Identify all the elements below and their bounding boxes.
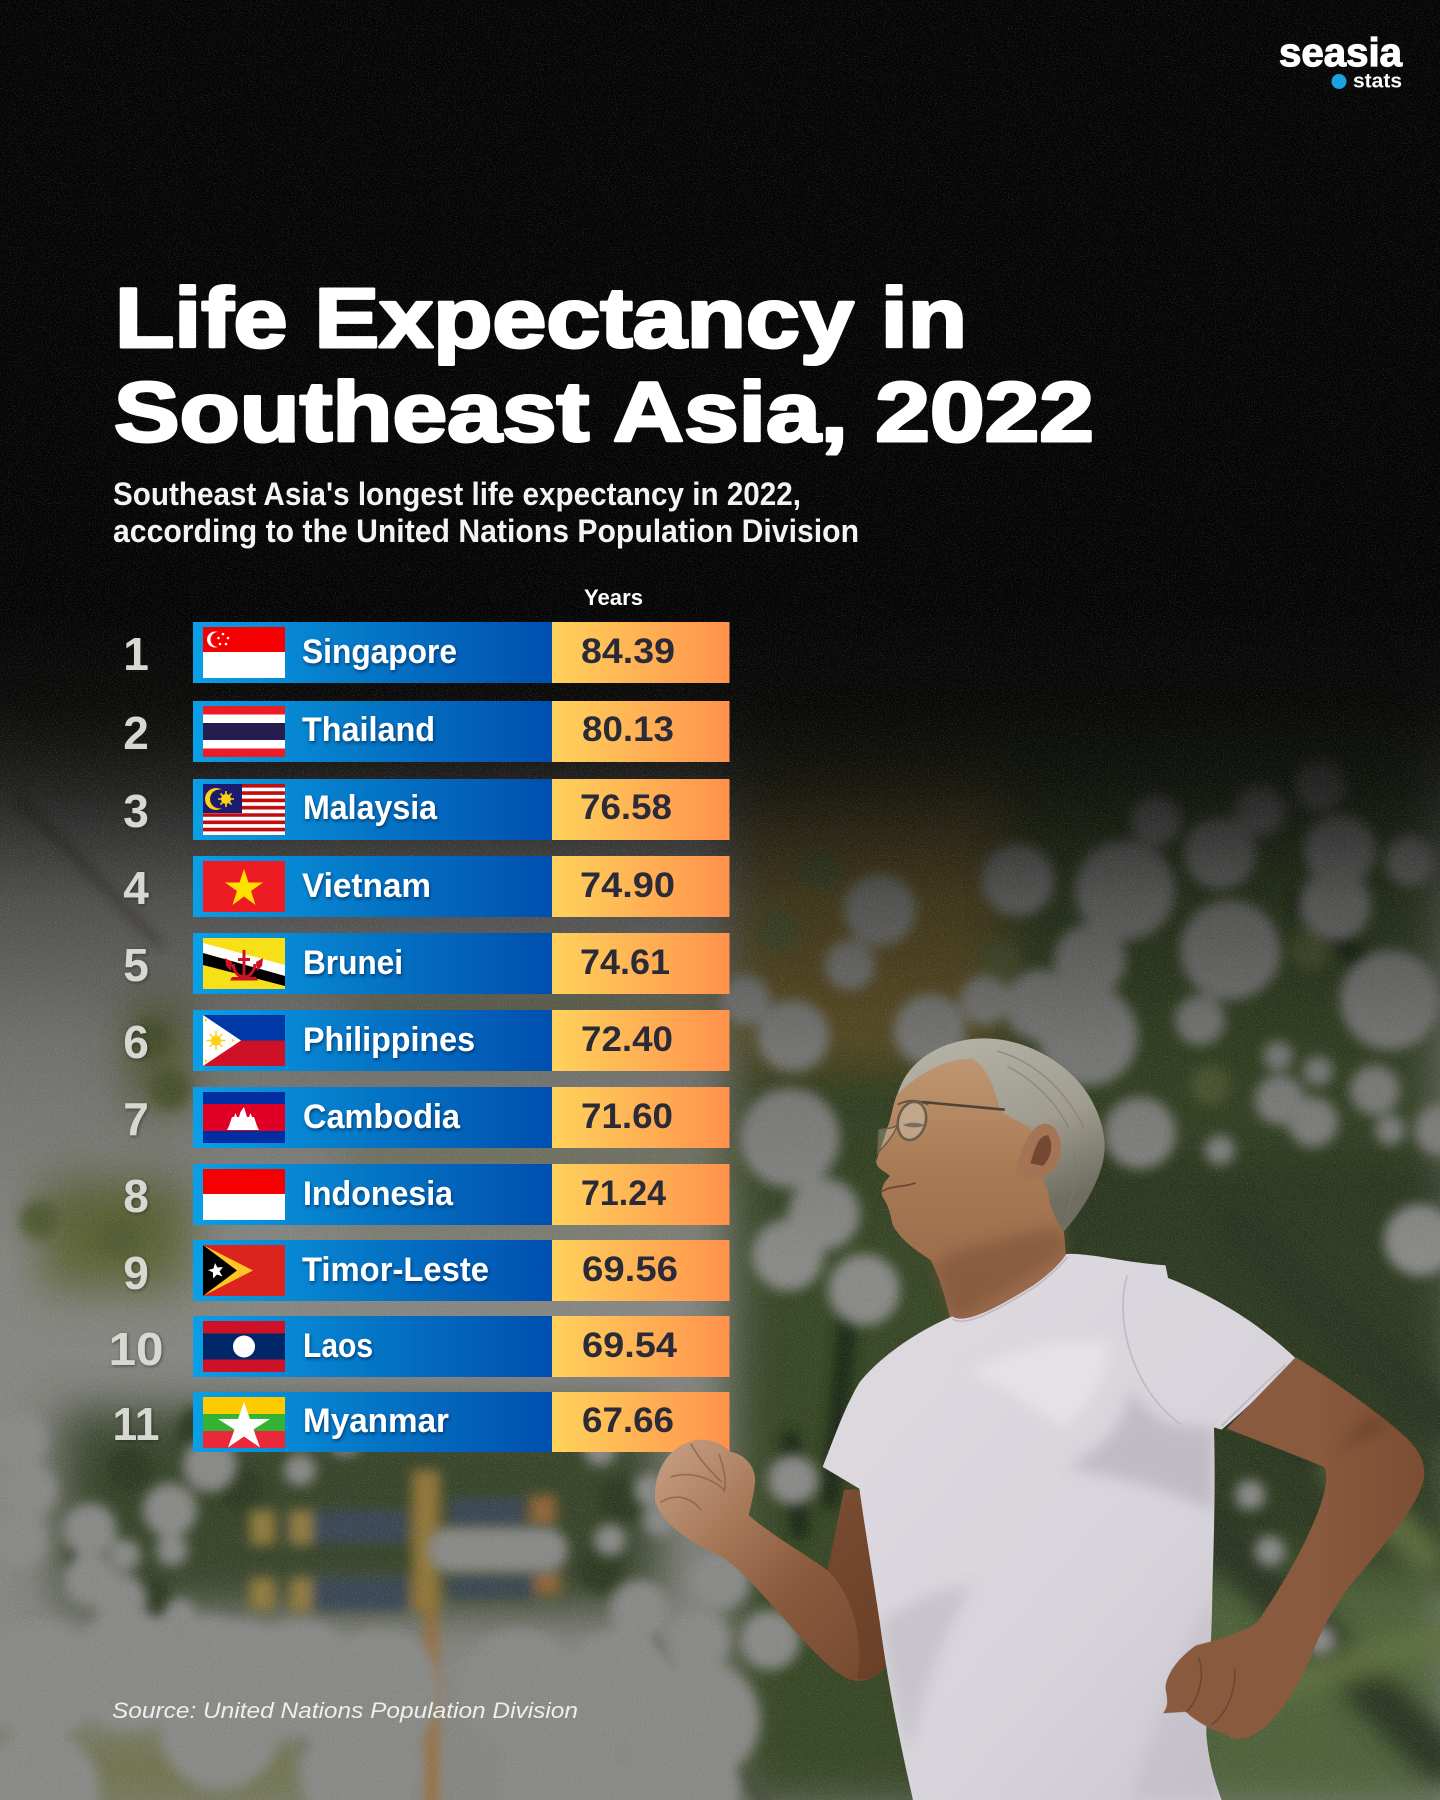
life expectancy values (580, 632, 678, 1440)
title: Life Expectancy in (115, 271, 967, 365)
rank numbers: 5 (123, 939, 149, 991)
country names (302, 633, 489, 1440)
rank numbers: 10 (108, 1323, 164, 1375)
road signs behind the trees (285, 1498, 535, 1610)
rank numbers: 8 (123, 1170, 149, 1222)
subtitle: according to the United Nations Population Division (113, 513, 859, 549)
rank numbers: 7 (123, 1093, 149, 1145)
glasses (878, 1099, 1005, 1153)
rank numbers: 2 (123, 707, 149, 759)
row bars (193, 622, 730, 1452)
rank numbers: 3 (123, 785, 149, 837)
title: Southeast Asia, 2022 (114, 365, 1094, 459)
life expectancy values: 69.54 (582, 1326, 678, 1365)
flag: Vietnam (203, 861, 285, 912)
title (114, 271, 1094, 459)
rank numbers: 9 (123, 1247, 149, 1299)
flag: Brunei (203, 938, 285, 989)
ear (1015, 1124, 1061, 1180)
country names: Cambodia (303, 1098, 461, 1136)
rank numbers: 4 (123, 862, 149, 914)
flag: Cambodia (203, 1092, 285, 1143)
life expectancy values: 71.24 (581, 1174, 667, 1213)
country names: Laos (303, 1327, 373, 1365)
flag: Thailand (203, 706, 285, 757)
rank numbers: 1 (123, 628, 149, 680)
column heading: years: Years (584, 585, 643, 610)
flag: Philippines (203, 1015, 285, 1066)
country names: Indonesia (303, 1175, 454, 1213)
subtitle: Southeast Asia's longest life expectancy in 2022, (113, 476, 801, 512)
life expectancy values: 71.60 (581, 1097, 673, 1136)
country names: Singapore (302, 633, 457, 671)
white t-shirt (823, 1254, 1297, 1800)
country names: Myanmar (303, 1402, 449, 1440)
country names: Timor-Leste (302, 1251, 489, 1289)
life expectancy values: 80.13 (582, 710, 674, 749)
life expectancy values: 72.40 (581, 1020, 673, 1059)
country names: Brunei (303, 944, 403, 982)
rank numbers: 11 (112, 1398, 160, 1450)
flag: Malaysia (203, 784, 285, 835)
life expectancy values: 69.56 (582, 1250, 678, 1289)
source note: Source: United Nations Population Division (112, 1698, 578, 1723)
far arm and hand, in front of the shirt (1163, 1357, 1424, 1739)
life expectancy values: 74.61 (580, 943, 670, 982)
near arm and fist (655, 1440, 887, 1681)
country names: Philippines (303, 1021, 475, 1059)
flag: Timor-Leste (203, 1245, 285, 1296)
life expectancy values: 84.39 (581, 632, 675, 671)
hair (898, 1038, 1105, 1232)
subtitle (113, 476, 859, 549)
flag: Myanmar (203, 1397, 285, 1448)
country names: Vietnam (302, 867, 431, 905)
life expectancy values: 67.66 (582, 1401, 674, 1440)
flag: Singapore (203, 627, 285, 678)
country names: Thailand (302, 711, 435, 749)
life expectancy values: 74.90 (580, 866, 675, 905)
man jogging (655, 1038, 1424, 1800)
flag: Laos (203, 1321, 285, 1372)
neck and face (876, 1051, 1066, 1327)
rank numbers: 6 (123, 1016, 149, 1068)
grey mass at lower centre (450, 1527, 545, 1573)
flag: Indonesia (203, 1169, 285, 1220)
logo: seasia stats: seasia (1279, 31, 1403, 75)
country names: Malaysia (303, 789, 438, 827)
rank numbers (108, 628, 164, 1450)
life expectancy values: 76.58 (580, 788, 672, 827)
ranking table (108, 622, 730, 1452)
logo: seasia stats: stats (1353, 70, 1402, 92)
